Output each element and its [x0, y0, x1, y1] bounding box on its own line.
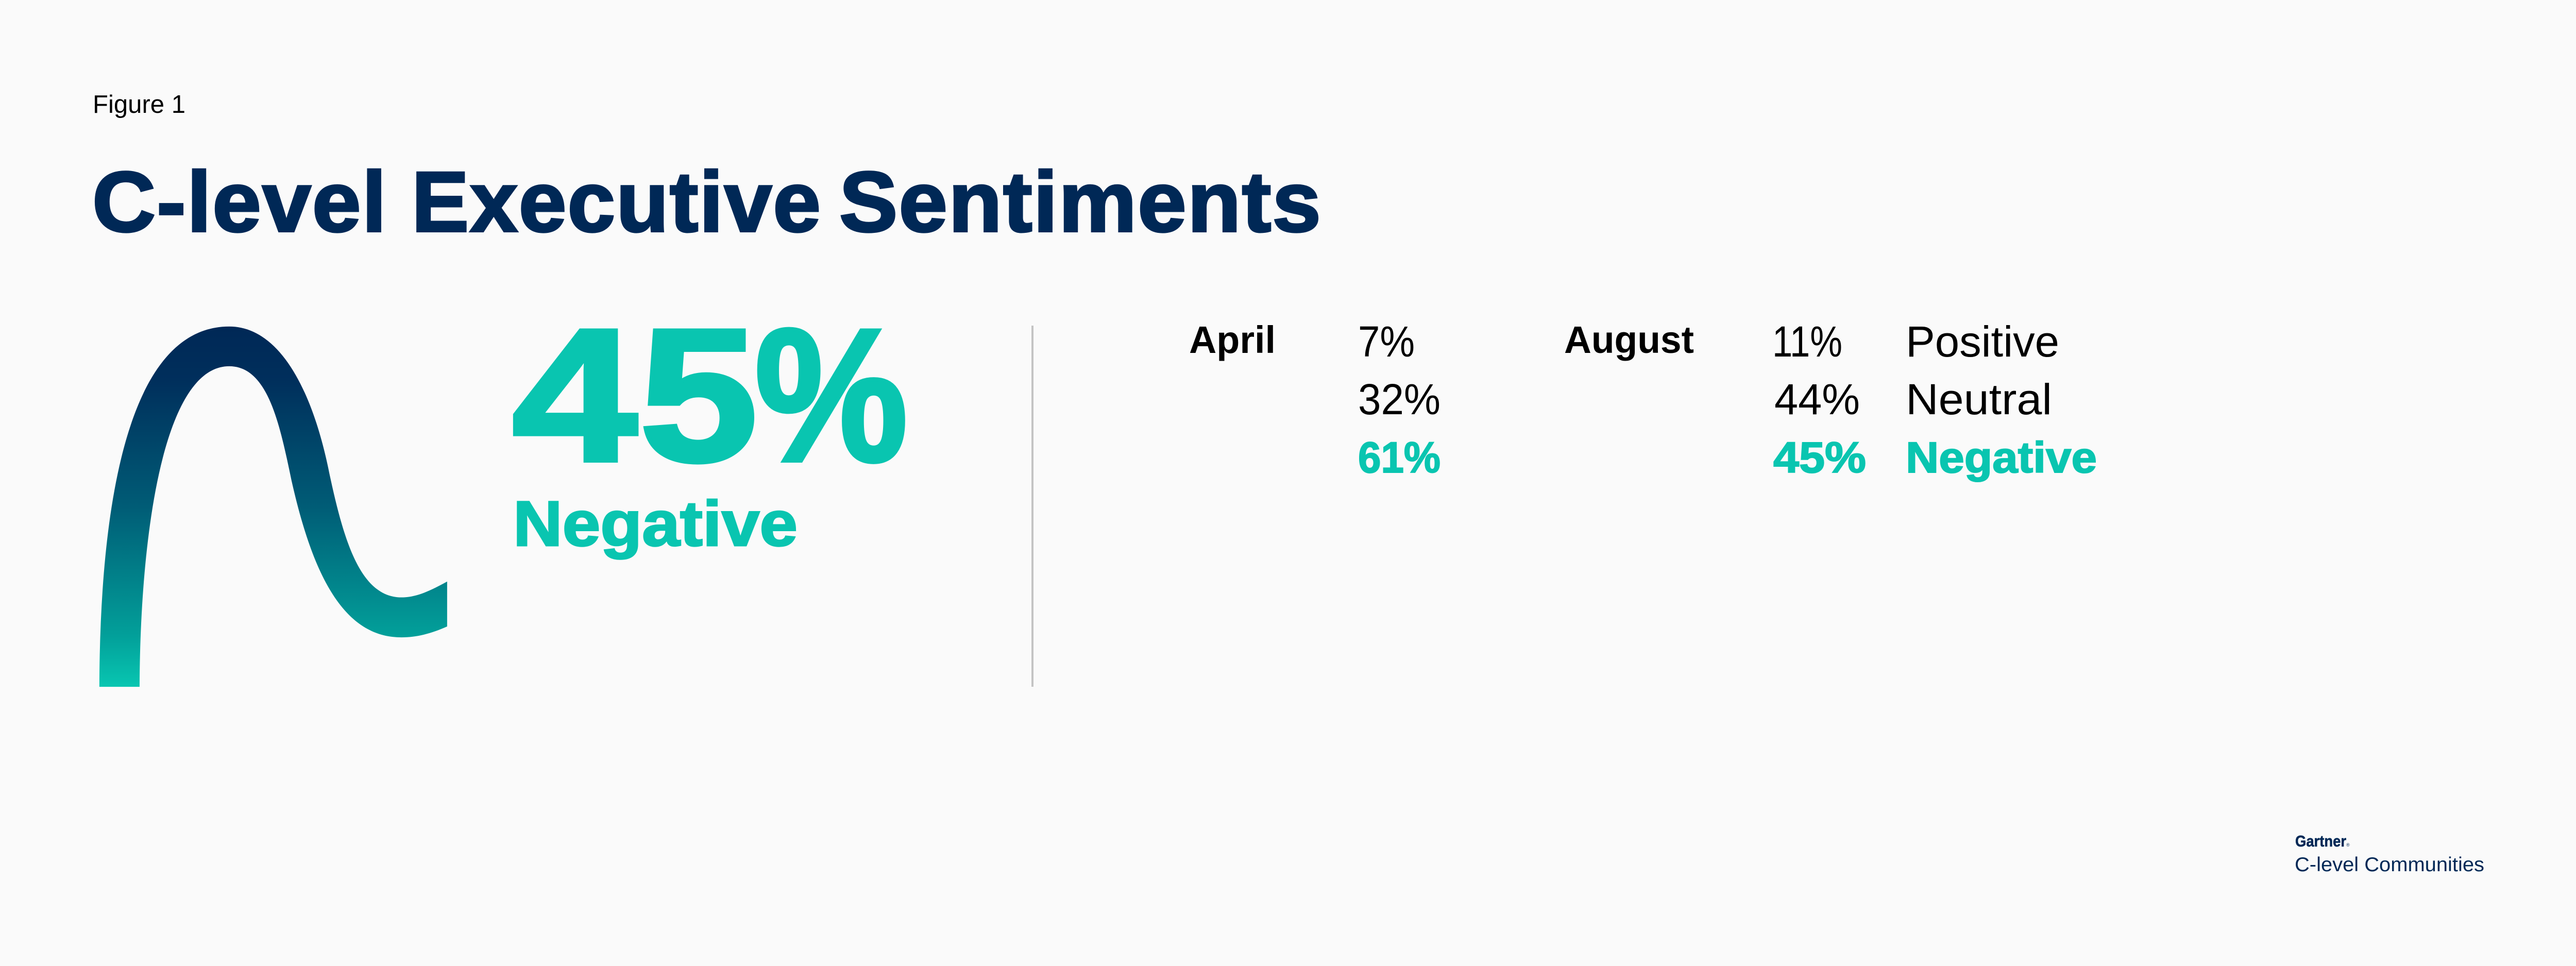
footer logo: Gartner [2295, 832, 2346, 850]
big stat: 45%: 5 [639, 290, 758, 501]
April values: 7% [1358, 317, 1415, 366]
August heading: August [1564, 318, 1694, 361]
April values: 61% [1358, 433, 1440, 482]
title [92, 155, 1322, 250]
big stat: 45%: % [755, 290, 908, 501]
title: Executive [412, 155, 822, 250]
April heading: April [1189, 318, 1276, 361]
sentiment curve [99, 327, 447, 687]
figure label: Figure 1 [93, 91, 185, 118]
April values: 32% [1358, 375, 1440, 423]
April values [1358, 317, 1440, 482]
big stat: 45% [512, 290, 908, 501]
divider [1031, 326, 1033, 687]
legend labels: Negative [1906, 433, 2097, 482]
legend labels: Positive [1906, 317, 2059, 366]
August values [1772, 317, 1866, 482]
big stat: 45%: 4 [512, 290, 639, 501]
footer logo: C-level Communities [2295, 854, 2484, 876]
title: Sentiments [839, 155, 1322, 250]
title: C-level [92, 155, 387, 250]
legend labels: Neutral [1906, 375, 2052, 423]
August values: 45% [1773, 433, 1866, 482]
legend labels [1906, 317, 2097, 482]
footer logo [2295, 832, 2484, 876]
August values: 44% [1774, 375, 1860, 423]
August values: 11% [1772, 317, 1842, 366]
big stat label: Negative [513, 488, 798, 560]
footer logo: ® [2346, 842, 2350, 848]
